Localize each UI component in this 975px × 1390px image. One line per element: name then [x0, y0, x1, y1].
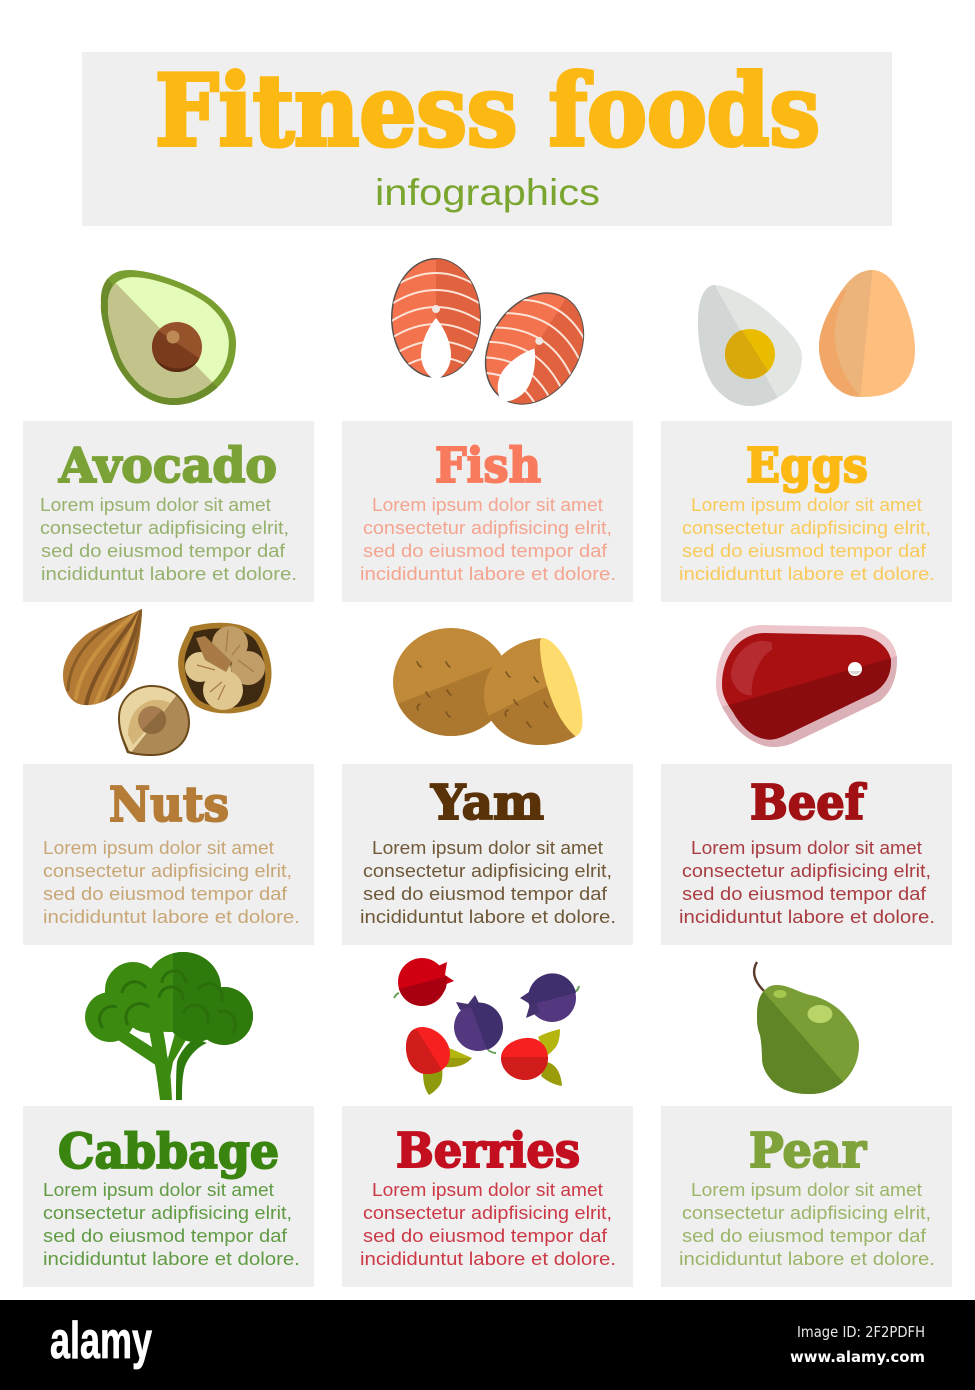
icon: eggs [698, 270, 915, 406]
red berry with leaves [406, 1027, 472, 1095]
panel: yam: sed do eiusmod tempor daf [363, 884, 608, 904]
red berry with leaves [498, 1029, 562, 1086]
panel: fish: incididuntut labore et dolore. [360, 564, 616, 584]
walnut [178, 623, 272, 713]
panel: eggs: Lorem ipsum dolor sit amet [691, 495, 922, 515]
panel: fish [342, 421, 633, 602]
panel: pear: sed do eiusmod tempor daf [682, 1226, 927, 1246]
blueberry [520, 973, 579, 1022]
icon: berries [394, 958, 579, 1095]
panel: eggs [661, 421, 952, 602]
panel: yam: incididuntut labore et dolore. [360, 907, 616, 927]
panel: beef: sed do eiusmod tempor daf [682, 884, 927, 904]
title: Fitness foods [155, 54, 820, 169]
panel: cabbage: incididuntut labore et dolore. [43, 1249, 300, 1269]
panel: yam: Lorem ipsum dolor sit amet [372, 838, 603, 858]
footer band: Image ID: 2F2PDFH [797, 1323, 925, 1341]
panel: pear: Pear [749, 1123, 867, 1179]
panel: nuts: Nuts [109, 777, 229, 833]
panel: berries: consectetur adipfisicing elrit, [363, 1203, 612, 1223]
panel: fish: Lorem ipsum dolor sit amet [372, 495, 603, 515]
whole yam [393, 628, 502, 736]
stems [148, 1025, 172, 1100]
panel: fish: Fish [435, 438, 541, 494]
panel: eggs: Eggs [746, 438, 868, 494]
halved egg [698, 285, 802, 406]
panel: berries: Lorem ipsum dolor sit amet [372, 1180, 603, 1200]
panel: yam: consectetur adipfisicing elrit, [363, 861, 612, 881]
panel: nuts: consectetur adipfisicing elrit, [43, 861, 292, 881]
icon: pear [752, 962, 859, 1094]
panel: cabbage: Lorem ipsum dolor sit amet [43, 1180, 274, 1200]
panel: avocado: incididuntut labore et dolore. [41, 564, 297, 584]
half yam [484, 638, 576, 745]
panel: beef: Beef [750, 775, 867, 831]
icon: nuts [55, 605, 272, 760]
panel: fish: consectetur adipfisicing elrit, [363, 518, 612, 538]
panel: avocado [23, 421, 314, 602]
panel: cabbage: sed do eiusmod tempor daf [43, 1226, 288, 1246]
panel: pear: incididuntut labore et dolore. [679, 1249, 935, 1269]
panel: fish: sed do eiusmod tempor daf [363, 541, 608, 561]
panel: berries: sed do eiusmod tempor daf [363, 1226, 608, 1246]
icon: beef [710, 625, 900, 750]
panel: beef: incididuntut labore et dolore. [679, 907, 935, 927]
panel: avocado: sed do eiusmod tempor daf [41, 541, 286, 561]
panel: nuts: sed do eiusmod tempor daf [43, 884, 288, 904]
panel: avocado: Lorem ipsum dolor sit amet [40, 495, 271, 515]
icon: avocado [100, 270, 236, 405]
panel: pear [661, 1106, 952, 1287]
icon: broccoli [80, 945, 258, 1100]
panel: eggs: incididuntut labore et dolore. [679, 564, 935, 584]
panel: berries: Berries [396, 1123, 580, 1179]
whole egg [819, 270, 915, 397]
panel: nuts: incididuntut labore et dolore. [43, 907, 300, 927]
almond [63, 609, 142, 706]
florets [85, 952, 253, 1045]
panel: berries [342, 1106, 633, 1287]
footer band: alamy [50, 1312, 152, 1370]
panel: cabbage [23, 1106, 314, 1287]
panel: yam: Yam [430, 775, 544, 831]
panel: eggs: consectetur adipfisicing elrit, [682, 518, 931, 538]
blueberry [454, 995, 503, 1053]
panel: nuts [23, 764, 314, 945]
panel: beef: consectetur adipfisicing elrit, [682, 861, 931, 881]
panel: eggs: sed do eiusmod tempor daf [682, 541, 927, 561]
panel: pear: consectetur adipfisicing elrit, [682, 1203, 931, 1223]
panel: beef: Lorem ipsum dolor sit amet [691, 838, 922, 858]
icon: fish steaks [390, 255, 610, 432]
yam face [540, 638, 582, 736]
red currant [394, 958, 454, 1006]
panel: avocado: Avocado [58, 438, 277, 494]
icon: yam [393, 628, 582, 745]
footer band: www.alamy.com [790, 1348, 925, 1366]
panel: berries: incididuntut labore et dolore. [360, 1249, 616, 1269]
panel: cabbage: consectetur adipfisicing elrit, [43, 1203, 292, 1223]
subtitle: infographics [375, 172, 600, 213]
footer band [0, 1300, 975, 1390]
panel: beef [661, 764, 952, 945]
panel: yam [342, 764, 633, 945]
panel: cabbage: Cabbage [58, 1124, 279, 1180]
panel: avocado: consectetur adipfisicing elrit, [40, 518, 289, 538]
panel: nuts: Lorem ipsum dolor sit amet [43, 838, 274, 858]
hazelnut [118, 685, 190, 756]
title panel [82, 52, 892, 226]
panel: pear: Lorem ipsum dolor sit amet [691, 1180, 922, 1200]
